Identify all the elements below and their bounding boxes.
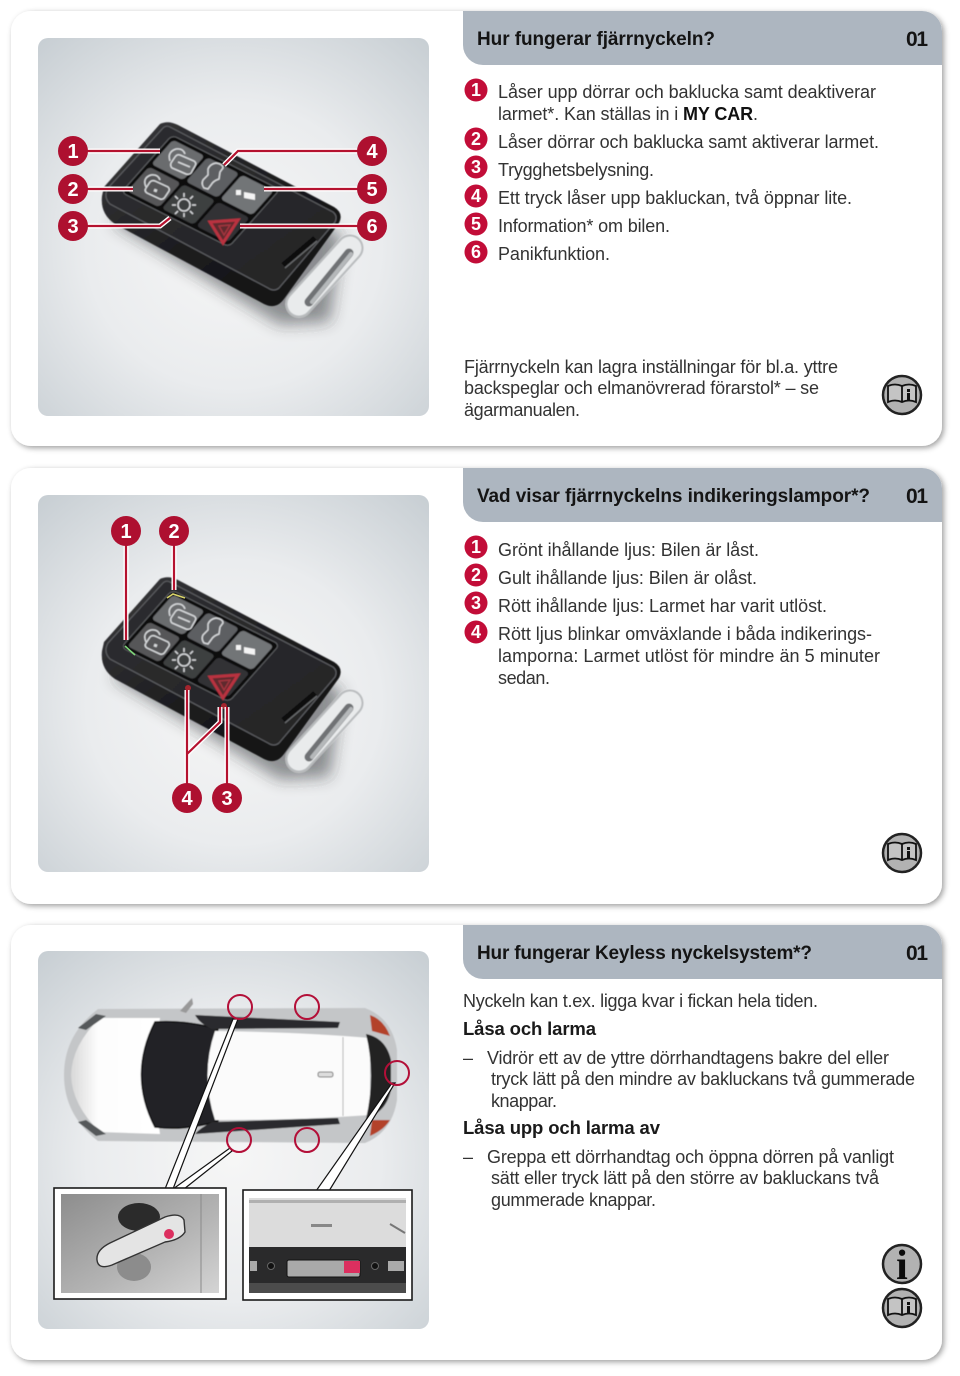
intro text: Nyckeln kan t.ex. ligga kvar i fickan hela tiden. (463, 991, 818, 1011)
callout 1 (58, 136, 88, 166)
inset: door handle (54, 1188, 226, 1299)
text: unlock and disarm: sätt eller tryck lätt på den större av bakluckans två (491, 1168, 880, 1188)
list of lamp states: Gult ihållande ljus: Bilen är olåst. (498, 568, 757, 588)
list of functions: larmet*. Kan ställas in i MY CAR. (498, 104, 758, 124)
list of functions: Låser dörrar och baklucka samt aktiverar larmet. (498, 132, 879, 152)
callout 4 (172, 783, 202, 813)
panel: keyless system (11, 925, 942, 1360)
photo background: remote key (38, 38, 429, 416)
section number: 01 (906, 942, 928, 965)
leader to door handle and boot (165, 1019, 395, 1191)
icon: owner's manual (883, 834, 921, 872)
photo: remote key fob (102, 122, 351, 325)
list of functions: Trygghetsbelysning. (498, 160, 654, 180)
list of lamp states: 2 (471, 565, 481, 585)
text: unlock and disarm: gummerade knappar. (491, 1190, 656, 1210)
touch spot (344, 1261, 360, 1273)
text: lock and arm: knappar. (491, 1091, 557, 1111)
text: lock and arm (463, 1048, 915, 1111)
indicator lamps (125, 594, 227, 709)
list of functions: Ett tryck låser upp bakluckan, två öppnar lite. (498, 188, 852, 208)
callout 2 (159, 516, 189, 546)
callout 3 (212, 783, 242, 813)
text: lock and arm: – (463, 1048, 473, 1068)
list of lamp states: lamporna: Larmet utlöst för mindre än 5 minuter (498, 646, 880, 666)
list of functions (464, 78, 879, 264)
photo background: indicator lamps (38, 495, 429, 872)
heading: Hur fungerar Keyless nyckelsystem*? (477, 943, 812, 964)
list of lamp states: Rött ihållande ljus: Larmet har varit utlöst. (498, 596, 827, 616)
section number: 01 (906, 485, 928, 508)
header bar (463, 468, 942, 522)
list of lamp states: 4 (471, 622, 481, 642)
note paragraph: backspeglar och elmanövrerad förarstol* – se (464, 378, 819, 398)
note paragraph: ägarmanualen. (464, 400, 580, 420)
circle markers (227, 995, 409, 1152)
icon: owner's manual (883, 376, 921, 414)
list of functions: Information* om bilen. (498, 216, 670, 236)
list of lamp states: 1 (471, 537, 481, 557)
note paragraph (464, 357, 838, 420)
list of functions: 3 (471, 157, 481, 177)
header bar (463, 925, 942, 979)
text: lock and arm: tryck lätt på den mindre av bakluckans två gummerade (491, 1069, 915, 1089)
panel: indicator lamps (11, 468, 942, 904)
callout 6: 6 (366, 216, 378, 238)
callout 1: 1 (67, 141, 79, 163)
text: unlock and disarm: – (463, 1147, 473, 1167)
callout 5: 5 (366, 179, 378, 201)
heading: Vad visar fjärrnyckelns indikeringslampor*? (477, 486, 870, 507)
list of lamp states (464, 536, 880, 688)
icon: information: i (896, 1243, 908, 1289)
photo background: car (38, 951, 429, 1329)
inset: boot handle (243, 1190, 412, 1300)
list of functions: 1 (471, 80, 481, 100)
text: lock and arm: Vidrör ett av de yttre dörrhandtagens bakre del eller (487, 1048, 889, 1068)
text: unlock and disarm: Greppa ett dörrhandtag och öppna dörren på vanligt (487, 1147, 894, 1167)
callout 6 (357, 211, 387, 241)
list of lamp states: Rött ljus blinkar omväxlande i båda indikerings- (498, 624, 872, 644)
callout 2: 2 (67, 179, 79, 201)
panel: how the remote key works (11, 11, 942, 446)
illustration: car from above (64, 998, 397, 1143)
touch spot (164, 1229, 174, 1239)
callout 1 (111, 516, 141, 546)
list of functions: Låser upp dörrar och baklucka samt deaktiverar (498, 82, 876, 102)
callout 2 (58, 174, 88, 204)
section number: 01 (906, 28, 928, 51)
list of functions: 2 (471, 129, 481, 149)
photo: remote key fob with indicator lamps (102, 577, 351, 780)
callout lines: remote key (73, 151, 372, 226)
callout 1: 1 (120, 521, 132, 543)
list of functions: Panikfunktion. (498, 244, 610, 264)
list of functions: 5 (471, 214, 481, 234)
note paragraph: Fjärrnyckeln kan lagra inställningar för bl.a. yttre (464, 357, 838, 377)
icon: owner's manual (883, 1289, 921, 1327)
callout lines: indicator lamps (126, 531, 227, 798)
callout 2: 2 (168, 521, 180, 543)
list of functions: 4 (471, 186, 481, 206)
list of lamp states: sedan. (498, 668, 550, 688)
list of lamp states: Grönt ihållande ljus: Bilen är låst. (498, 540, 759, 560)
text: unlock and disarm (463, 1147, 894, 1210)
list of lamp states: 3 (471, 593, 481, 613)
callout 3 (58, 211, 88, 241)
header bar (463, 11, 942, 65)
icon: information (883, 1243, 921, 1289)
callout 3: 3 (221, 788, 233, 810)
callout 3: 3 (67, 216, 79, 238)
subheading: unlock and disarm: Låsa upp och larma av (463, 1117, 661, 1138)
callout 5 (357, 174, 387, 204)
heading: Hur fungerar fjärrnyckeln? (477, 29, 715, 50)
callout 4: 4 (181, 788, 193, 810)
callout 4: 4 (366, 141, 378, 163)
list of functions: 6 (471, 242, 481, 262)
callout 4 (357, 136, 387, 166)
subheading: lock and arm: Låsa och larma (463, 1018, 597, 1039)
